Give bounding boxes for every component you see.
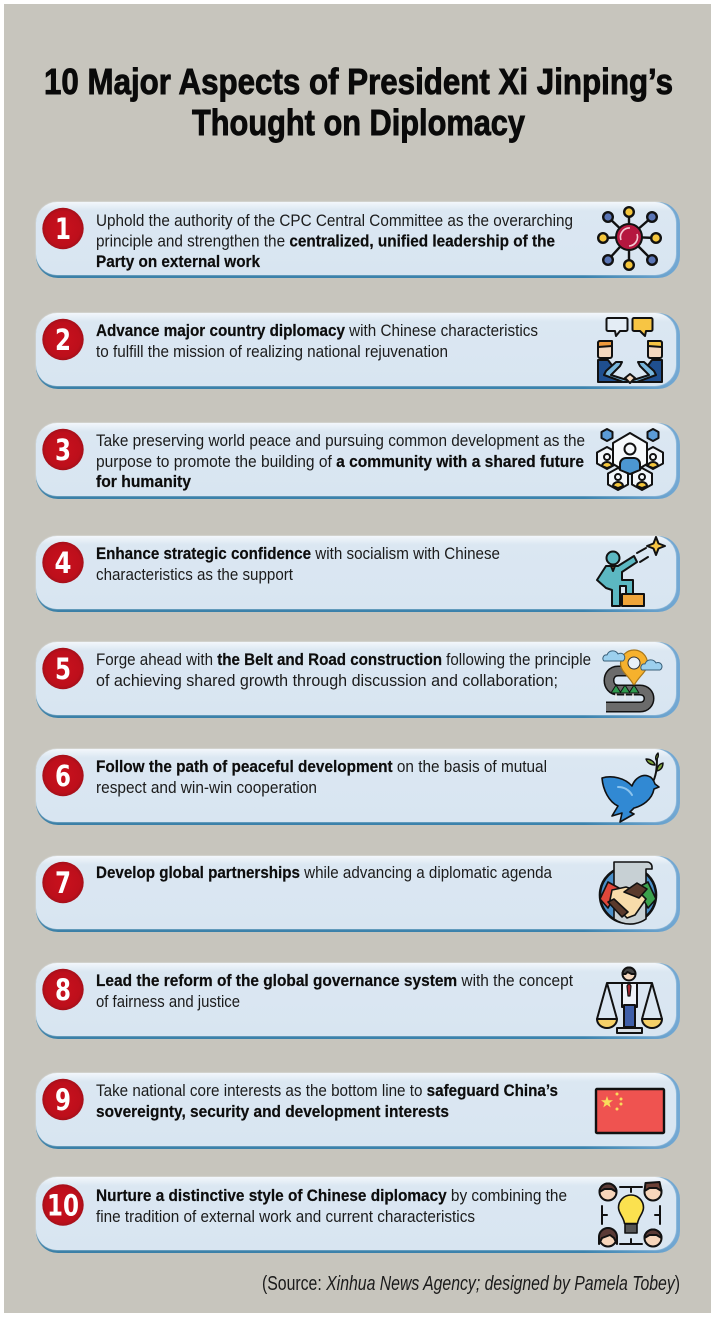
icon: person reaching for star	[597, 537, 665, 606]
number badge 9	[42, 1079, 84, 1120]
text: item 10: fine tradition of external work and current characteristics	[96, 1208, 475, 1226]
number badge 1: 1	[55, 212, 71, 246]
text: item 3: for humanity	[96, 473, 192, 491]
panel: item 5	[36, 642, 680, 718]
text: item 10: Nurture a distinctive style of Chinese diplomacy by combining the	[96, 1187, 567, 1205]
text: item 1	[96, 212, 573, 271]
number badge 3: 3	[55, 433, 71, 467]
number badge 8	[42, 969, 84, 1010]
text: item 6: respect and win-win cooperation	[96, 779, 317, 797]
icon: network hub	[598, 207, 661, 270]
icon: community hexagons	[597, 429, 663, 490]
text: item 5	[96, 651, 591, 690]
number badge 5: 5	[55, 652, 71, 686]
number badge 2: 2	[55, 323, 71, 357]
number badge 3	[42, 429, 84, 470]
panel: item 3	[36, 423, 680, 499]
text: item 2: to fulfill the mission of realizing national rejuvenation	[96, 343, 448, 361]
text: item 9: sovereignty, security and development interests	[96, 1103, 449, 1121]
icon: handshake	[600, 862, 656, 924]
text: item 10	[96, 1187, 567, 1226]
text: item 9	[96, 1082, 558, 1121]
text: item 6	[96, 758, 547, 797]
panel: item 6	[36, 749, 680, 825]
title	[44, 61, 673, 143]
text: item 5: Forge ahead with the Belt and Road construction following the principle	[96, 651, 591, 669]
number badge 1	[42, 208, 84, 249]
text: item 4	[96, 545, 500, 584]
text: item 2: Advance major country diplomacy with Chinese characteristics	[96, 322, 538, 340]
text: item 1: principle and strengthen the centralized, unified leadership of the	[96, 232, 555, 250]
text: item 6: Follow the path of peaceful development on the basis of mutual	[96, 758, 547, 776]
text: item 3: purpose to promote the building of a community with a shared future	[96, 453, 584, 471]
text: item 9: Take national core interests as the bottom line to safeguard China’s	[96, 1082, 558, 1100]
text: item 8: of fairness and justice	[96, 993, 240, 1011]
text: item 2	[96, 322, 538, 361]
text: item 3	[96, 432, 585, 491]
number badge 7	[42, 862, 84, 903]
panel: item 10	[36, 1177, 680, 1253]
icon: person as scales of justice	[597, 968, 662, 1033]
number badge 6: 6	[55, 759, 71, 793]
icon: road and map pin	[603, 650, 662, 707]
icon: Chinese flag	[596, 1089, 664, 1133]
number badge 10	[42, 1184, 84, 1226]
number badge 9: 9	[55, 1083, 71, 1117]
number badge 7: 7	[55, 866, 71, 900]
icon: team around light bulb	[599, 1182, 662, 1246]
number badge 8: 8	[55, 973, 71, 1007]
panel: item 4	[36, 536, 680, 612]
text: item 1: Uphold the authority of the CPC Central Committee as the overarching	[96, 212, 573, 230]
number badge 2	[42, 319, 84, 360]
panel: item 8	[36, 963, 680, 1039]
text: item 4: characteristics as the support	[96, 566, 293, 584]
number badge 4: 4	[54, 546, 72, 580]
number badge 4	[42, 542, 84, 583]
icon: peace dove	[602, 753, 663, 822]
number badge 6	[42, 755, 84, 796]
text: item 8: Lead the reform of the global governance system with the concept	[96, 972, 573, 990]
text: item 4: Enhance strategic confidence with socialism with Chinese	[96, 545, 500, 563]
number badge 10: 10	[47, 1188, 79, 1222]
text: item 5: of achieving shared growth through discussion and collaboration;	[96, 672, 558, 690]
text: item 3: Take preserving world peace and pursuing common development as the	[96, 432, 585, 450]
panel: item 1	[36, 202, 680, 278]
icon: two negotiators	[598, 318, 662, 383]
number badge 5	[42, 648, 84, 689]
text: item 8	[96, 972, 573, 1011]
text: item 7: Develop global partnerships while advancing a diplomatic agenda	[96, 864, 553, 882]
panel: item 2	[36, 313, 680, 389]
panel: item 9	[36, 1073, 680, 1149]
text: item 1: Party on external work	[96, 253, 261, 271]
panel: item 7	[36, 856, 680, 932]
title: Thought on Diplomacy	[192, 102, 525, 143]
